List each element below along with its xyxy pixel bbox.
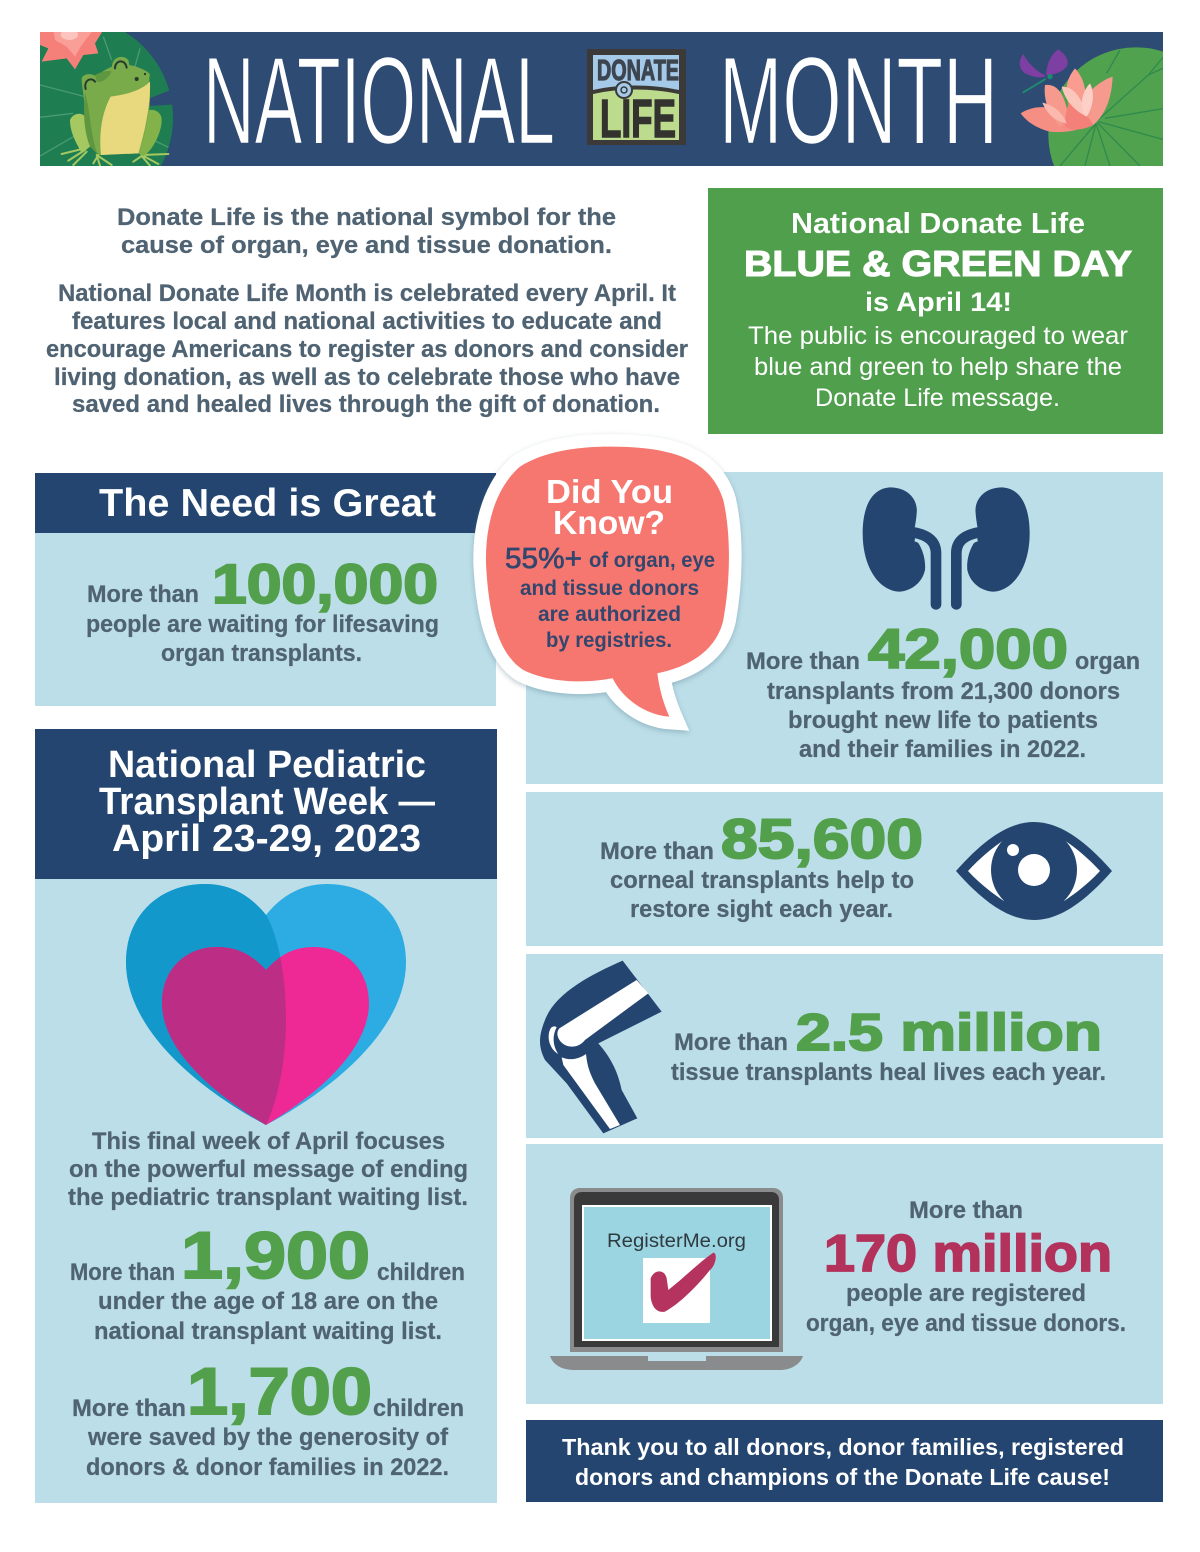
panel: organ transplants xyxy=(526,472,1163,784)
panel: thank you footer xyxy=(526,1420,1163,1502)
intro heading xyxy=(117,204,616,259)
statistic: 85,600: 85,600 xyxy=(721,807,923,870)
statistic: 170 million: people are registered xyxy=(846,1280,1086,1307)
statistic: 42,000: organ xyxy=(1075,648,1140,675)
intro paragraph: saved and healed lives through the gift of donation. xyxy=(72,391,660,418)
callout: Did You Know speech bubble xyxy=(486,447,729,717)
icon: knee joint xyxy=(540,961,662,1133)
icon: laptop with RegisterMe.org: RegisterMe.org xyxy=(607,1231,746,1252)
callout body: are authorized xyxy=(538,603,681,626)
statistic: 85,600 xyxy=(600,807,923,923)
statistic: 100,000 xyxy=(86,552,439,667)
statistic: 1,700: donors & donor families in 2022. xyxy=(86,1454,449,1481)
intro paragraph xyxy=(46,280,688,418)
green panel body xyxy=(748,322,1128,412)
pediatric heading: National Pediatric xyxy=(108,744,426,786)
logo: Donate Life: LIFE xyxy=(600,89,676,149)
statistic: 1,900: 1,900 xyxy=(181,1218,370,1292)
callout heading: Know? xyxy=(553,505,665,542)
statistic: 42,000 xyxy=(746,617,1140,763)
intro heading: cause of organ, eye and tissue donation. xyxy=(121,232,612,259)
statistic: 170 million: 170 million xyxy=(824,1225,1112,1283)
intro paragraph: features local and national activities to educate and xyxy=(72,308,662,335)
header banner xyxy=(40,32,1163,166)
statistic: 100,000: people are waiting for lifesaving xyxy=(86,611,439,638)
panel: tissue transplants xyxy=(526,954,1163,1138)
pediatric heading: Transplant Week — xyxy=(99,781,435,823)
statistic: 42,000: brought new life to patients xyxy=(788,707,1098,734)
intro heading: Donate Life is the national symbol for the xyxy=(117,204,616,231)
green panel body: The public is encouraged to wear xyxy=(748,322,1128,350)
statistic: 170 million: More than xyxy=(909,1197,1023,1224)
statistic: 85,600: restore sight each year. xyxy=(630,896,893,923)
statistic: 1,700: were saved by the generosity of xyxy=(87,1424,449,1451)
panel: thank you footer: Thank you to all donors, donor families, registered xyxy=(562,1434,1124,1460)
statistic: 1,700 xyxy=(72,1354,464,1481)
callout body: by registries. xyxy=(546,629,672,652)
statistic: 2.5 million: 2.5 million xyxy=(796,1004,1102,1062)
panel: corneal transplants xyxy=(526,792,1163,946)
title word: month: MONTH xyxy=(719,32,998,170)
statistic: 1,700: children xyxy=(373,1395,464,1422)
panel: Blue and Green Day xyxy=(708,188,1163,434)
green panel body: Donate Life message. xyxy=(815,384,1060,412)
statistic: 1,900: national transplant waiting list. xyxy=(94,1318,442,1345)
green panel heading: National Donate Life xyxy=(791,208,1085,240)
green panel date: is April 14! xyxy=(865,287,1012,317)
icon: laptop with RegisterMe.org xyxy=(550,1188,803,1370)
callout body: 55%+ xyxy=(505,543,582,575)
statistic: 42,000: More than xyxy=(746,648,860,675)
title word: national: NATIONAL xyxy=(203,32,555,170)
statistic: 1,700: More than xyxy=(72,1395,186,1422)
panel: National Pediatric Transplant Week xyxy=(35,729,497,1503)
statistic: 170 million xyxy=(806,1197,1126,1337)
panel: registered donors xyxy=(526,1144,1163,1404)
callout heading xyxy=(546,474,673,542)
callout heading: Did You xyxy=(546,474,673,511)
statistic: 85,600: More than xyxy=(600,838,714,865)
illustration: frog on lily pad xyxy=(40,32,173,166)
pediatric description: This final week of April focuses xyxy=(92,1128,445,1155)
statistic: 100,000: 100,000 xyxy=(212,552,438,615)
pediatric heading: April 23-29, 2023 xyxy=(112,818,421,860)
logo: Donate Life xyxy=(587,49,686,149)
statistic: 100,000: More than xyxy=(87,581,199,608)
statistic: 42,000: and their families in 2022. xyxy=(799,736,1086,763)
logo: Donate Life: DONATE xyxy=(597,55,679,87)
illustration: lotus and dragonfly on lily pad xyxy=(1020,47,1163,166)
statistic: 85,600: corneal transplants help to xyxy=(610,867,914,894)
callout body xyxy=(505,543,715,652)
statistic: 170 million: organ, eye and tissue donors. xyxy=(806,1310,1126,1337)
pediatric heading xyxy=(99,744,435,860)
statistic: 2.5 million xyxy=(671,1004,1106,1086)
callout body: and tissue donors xyxy=(520,577,699,600)
need heading: The Need is Great xyxy=(99,482,436,525)
panel: The Need is Great xyxy=(35,473,496,706)
statistic: 2.5 million: More than xyxy=(674,1029,788,1056)
icon: kidneys xyxy=(863,487,1030,604)
callout body: of organ, eye xyxy=(589,549,715,572)
pediatric description xyxy=(68,1128,468,1211)
statistic: 1,900: More than xyxy=(70,1259,175,1286)
pediatric description: on the powerful message of ending xyxy=(69,1156,468,1183)
intro paragraph: encourage Americans to register as donors and consider xyxy=(46,336,688,363)
statistic: 1,900: under the age of 18 are on the xyxy=(98,1288,438,1315)
icon: eye xyxy=(956,822,1112,920)
pediatric description: the pediatric transplant waiting list. xyxy=(68,1184,468,1211)
intro text xyxy=(46,204,688,418)
statistic: 42,000: 42,000 xyxy=(868,617,1068,680)
statistic: 1,700: 1,700 xyxy=(187,1354,372,1428)
green panel headline: BLUE & GREEN DAY xyxy=(744,243,1132,284)
statistic: 2.5 million: tissue transplants heal lives each year. xyxy=(671,1059,1106,1086)
panel: thank you footer: donors and champions of the Donate Life cause! xyxy=(575,1464,1110,1490)
statistic: 1,900 xyxy=(70,1218,465,1345)
intro paragraph: National Donate Life Month is celebrated every April. It xyxy=(58,280,676,307)
statistic: 100,000: organ transplants. xyxy=(161,640,362,667)
icon: overlapping hearts xyxy=(126,884,406,1125)
green panel body: blue and green to help share the xyxy=(754,353,1122,381)
statistic: 42,000: transplants from 21,300 donors xyxy=(767,678,1120,705)
statistic: 1,900: children xyxy=(377,1259,465,1286)
intro paragraph: living donation, as well as to celebrate those who have xyxy=(54,364,680,391)
